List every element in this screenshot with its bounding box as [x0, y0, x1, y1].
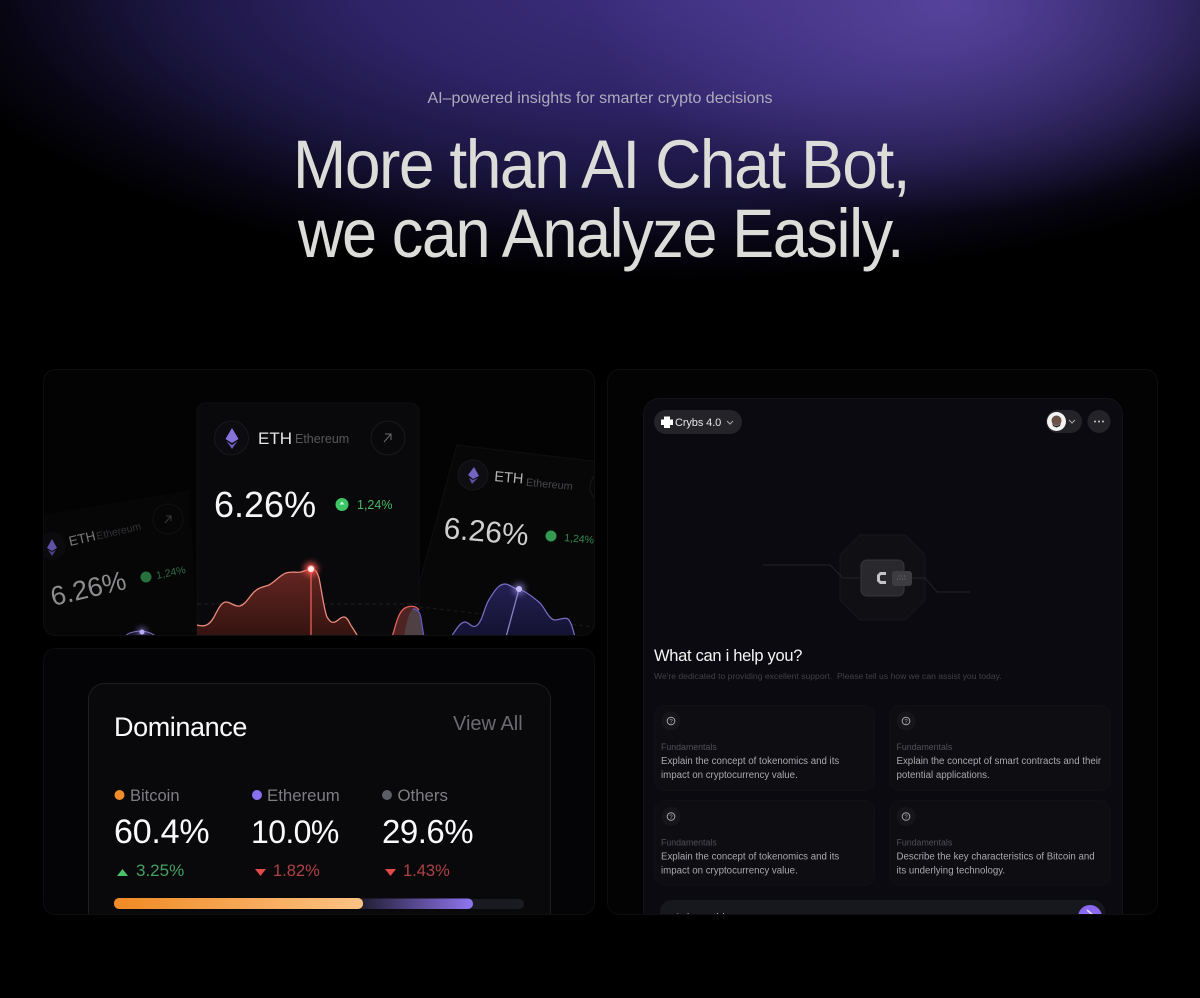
- heading: help: What can i help you?: [654, 647, 802, 665]
- chart left: [126, 624, 155, 635]
- icon: arrow center: [371, 421, 405, 455]
- prompt card 1: impact on cryptocurrency value.: [661, 770, 798, 781]
- value left: 6.26%: [48, 565, 129, 612]
- label: ETH Ethereum right: [495, 471, 572, 490]
- tagline: AI–powered insights for smarter crypto decisions: [427, 90, 773, 107]
- stat: Ethereum: Ethereum: [267, 786, 340, 805]
- label: ETH Ethereum left: [69, 524, 141, 546]
- badge right: 1,24%: [564, 532, 594, 547]
- label: ETH Ethereum right: Ethereum: [525, 477, 573, 493]
- prompt card 3: ?: [669, 815, 673, 821]
- chart center: [197, 562, 424, 637]
- prompt card 1: Fundamentals: [661, 742, 717, 752]
- heading: Dominance: Dominance: [114, 712, 247, 742]
- prompt card 4: its underlying technology.: [896, 866, 1005, 876]
- stat: Ethereum: 1.82%: [273, 862, 320, 880]
- value center: 6.26%: [214, 484, 316, 525]
- stat: Bitcoin: 3.25%: [136, 861, 184, 880]
- prompt card 2: [890, 706, 1110, 790]
- input box: [660, 900, 1105, 940]
- panel: token cards: [38, 369, 622, 643]
- stat: Others: Others: [398, 786, 448, 805]
- badge right: [546, 530, 594, 544]
- icon: arrow left: [153, 504, 183, 534]
- card: center ETH: [197, 403, 424, 643]
- avatar menu: [1046, 410, 1082, 433]
- card: right tilted ETH: [420, 444, 595, 635]
- arrow circle right: [590, 476, 594, 498]
- label: ETH Ethereum left: Ethereum: [95, 521, 143, 543]
- stat: Others: 29.6%: [382, 813, 473, 850]
- prompt card 1: [662, 712, 839, 780]
- value right: 6.26%: [442, 512, 530, 552]
- chat window: [644, 398, 1122, 940]
- stat: Bitcoin: Bitcoin: [130, 787, 180, 805]
- prompt card 4: [890, 800, 1110, 886]
- badge left: 1,24%: [155, 564, 187, 582]
- panel: dominance: [43, 648, 595, 934]
- stat: Bitcoin: 60.4%: [114, 813, 209, 851]
- prompt card 1: Explain the concept of tokenomics and its: [661, 756, 839, 767]
- prompt card 4: Describe the key characteristics of Bitcoin and: [896, 852, 1095, 862]
- prompt card 3: Fundamentals: [661, 838, 717, 848]
- title: we can Analyze Easily.: [297, 195, 903, 273]
- card: left tilted ETH: [44, 504, 186, 635]
- label: ETH Ethereum center: Ethereum: [295, 432, 349, 446]
- stat: Ethereum: 10.0%: [251, 814, 339, 850]
- panel: chat: [607, 369, 1158, 940]
- model selector: Crybs 4.0: [675, 417, 721, 429]
- badge center: 1,24%: [357, 498, 392, 512]
- model selector: [654, 410, 742, 434]
- label: ETH Ethereum left: ETH: [67, 528, 97, 549]
- link: View All: View All: [453, 713, 523, 735]
- prompt card 4: ?: [904, 815, 908, 821]
- badge center: [336, 498, 392, 512]
- chart right: [451, 583, 575, 637]
- illustration: chip: [763, 535, 970, 620]
- prompt card 2: ?: [904, 719, 908, 725]
- more button: [1088, 410, 1110, 433]
- chart overlap peak: [392, 606, 424, 637]
- label: ETH Ethereum right: ETH: [494, 469, 524, 488]
- prompt card 3: Explain the concept of tokenomics and its: [661, 852, 839, 862]
- title: [293, 127, 909, 273]
- stat: Others: 1.43%: [403, 862, 450, 880]
- prompt card 2: potential applications.: [896, 770, 990, 781]
- icon: ETH center: [214, 421, 248, 455]
- subtext: We're dedicated to providing excellent support. Please tell us how we can assist you today.: [654, 671, 1002, 681]
- badge left: [140, 566, 186, 582]
- dominance card: [88, 684, 550, 934]
- title: More than AI Chat Bot,: [293, 127, 909, 204]
- prompt card 1: ?: [669, 719, 673, 725]
- label: ETH Ethereum center: ETH: [258, 429, 292, 448]
- stat: Others: [382, 786, 473, 880]
- input box: Ask anything: [674, 912, 737, 924]
- stat: Bitcoin: [114, 787, 209, 880]
- bar: dominance split: [114, 898, 524, 909]
- label: ETH Ethereum center: [259, 432, 348, 444]
- prompt card 4: Fundamentals: [896, 838, 953, 848]
- prompt card 3: impact on cryptocurrency value.: [661, 866, 798, 876]
- stat: Ethereum: [251, 786, 340, 880]
- icon: ETH left: [47, 539, 57, 556]
- prompt card 2: Fundamentals: [896, 742, 953, 752]
- prompt card 2: Explain the concept of smart contracts and their: [896, 756, 1102, 767]
- icon: ETH right: [458, 460, 488, 490]
- prompt card 3: [654, 800, 874, 886]
